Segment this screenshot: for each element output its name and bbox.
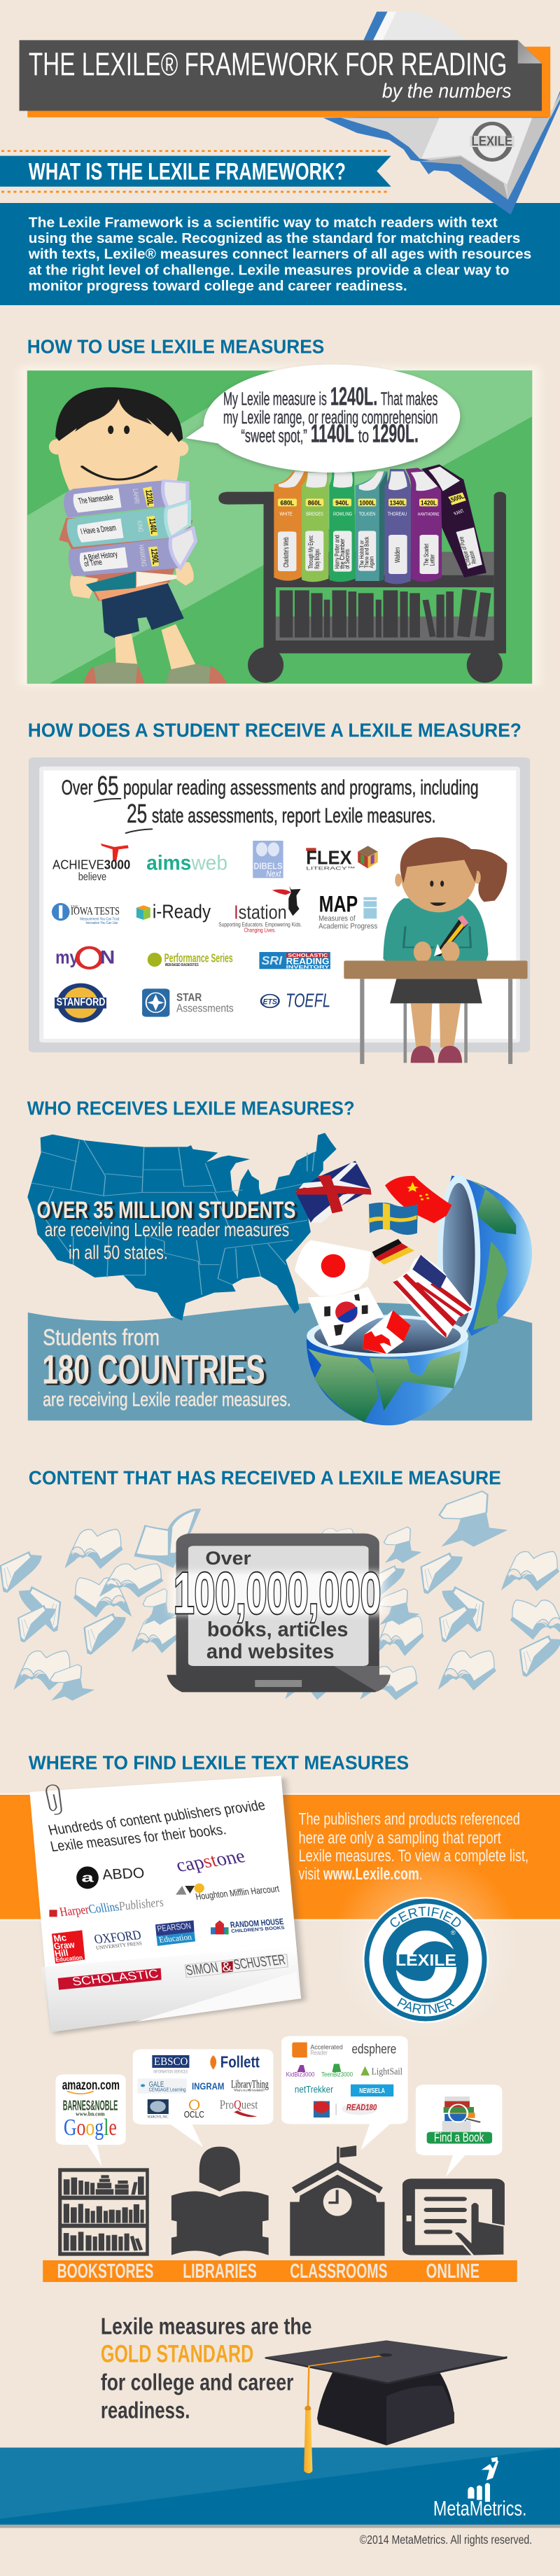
handwritten note: Lexile measures for their books. bbox=[49, 1821, 227, 1855]
book: a brief history of time: HAWKING bbox=[137, 545, 148, 567]
section: where to find, venues bbox=[43, 2036, 517, 2282]
section: header and what is the lexile framework bbox=[0, 12, 560, 305]
shoes bbox=[84, 662, 145, 683]
logo: achieve3000 bbox=[52, 844, 130, 883]
logo: read 180 bbox=[314, 2101, 377, 2118]
logo: ebsco: EBSCO bbox=[154, 2056, 188, 2068]
logo: mcgraw-hill education: Mc bbox=[52, 1932, 68, 1944]
illustration: book cart bbox=[218, 492, 506, 682]
callout: libraries bubble: INFORMATION SERVICES bbox=[153, 2069, 188, 2074]
book: the scarlet letter 1420L: Letter bbox=[428, 554, 436, 566]
book: i have a dream: I Have a Dream bbox=[80, 524, 117, 536]
logo: flex literacy: FLEX bbox=[306, 846, 352, 869]
badge: certified lexile partner: LEXILE bbox=[396, 1951, 456, 1969]
stat: 180 countries: 180 COUNTRIES bbox=[42, 1347, 265, 1392]
text block: assessments statement: Over bbox=[62, 776, 93, 799]
ribbon heading bbox=[0, 156, 391, 187]
book: harry potter 940L: ROWLING bbox=[333, 511, 352, 517]
logo: accelerated reader: Reader bbox=[310, 2049, 328, 2057]
text block: gold standard statement: Lexile measures are the bbox=[101, 2314, 312, 2339]
logo: accelerated reader: Accelerated bbox=[310, 2043, 343, 2051]
globe top half bbox=[438, 1175, 532, 1336]
icon: school building bbox=[290, 2146, 384, 2256]
book: harry potter 940L: the Chamber bbox=[339, 538, 346, 569]
text block: gold standard statement: GOLD STANDARD bbox=[101, 2340, 253, 2367]
badge: certified lexile partner bbox=[342, 1858, 510, 2023]
book: critique of pure reason 1500L: KANT bbox=[452, 508, 466, 516]
flag: united kingdom bbox=[295, 1161, 372, 1223]
logo: oxford: UNIVERSITY PRESS bbox=[95, 1941, 143, 1951]
book: a brief history of time: of Time bbox=[83, 558, 103, 568]
illustration: laptop bbox=[167, 1534, 391, 1692]
icon: bookshelf bbox=[58, 2168, 149, 2256]
handwritten note bbox=[46, 1797, 267, 1855]
book: the hobbit 1000L: Again bbox=[368, 556, 375, 568]
eyes and mouth bbox=[430, 881, 433, 887]
book: walden 1340L bbox=[384, 469, 411, 584]
text block: assessments statement: 65 bbox=[97, 770, 118, 801]
flag: south korea bbox=[308, 1287, 384, 1346]
logo: proquest bbox=[220, 2098, 258, 2117]
dotted rule bottom bbox=[1, 189, 389, 195]
section: where to find lexile text measures bbox=[0, 1752, 560, 2035]
book: through my eyes 860L: BRIDGES bbox=[306, 511, 323, 517]
book: the namesake: LAHIRI bbox=[131, 489, 141, 504]
logo: houghton mifflin harcourt: Houghton Mifflin Harcourt bbox=[195, 1883, 281, 1902]
logo: achieve3000: believe bbox=[78, 870, 106, 883]
callout: classrooms bubble bbox=[281, 2036, 408, 2150]
stat: over 100,000,000 books, articles and websites bbox=[174, 1548, 381, 1663]
book: the scarlet letter 1420L: The Scarlet bbox=[423, 543, 430, 566]
logo: harpercollins bbox=[49, 1896, 165, 1919]
logo: performance series: WEB-BASED DIAGNOSTICS bbox=[165, 963, 199, 967]
logo: performance series bbox=[148, 951, 233, 967]
logo: kidbiz3000 bbox=[286, 2065, 315, 2078]
logo: star assessments: STAR bbox=[176, 991, 202, 1004]
callout: bookstores bubble: amazon.com bbox=[62, 2078, 120, 2093]
speech text: “sweet spot,” bbox=[241, 426, 307, 447]
shorts bbox=[102, 583, 184, 638]
book: charlotte's web 680L bbox=[274, 471, 308, 581]
book: through my eyes 860L bbox=[302, 472, 328, 582]
text block: assessments statement: 25 bbox=[127, 798, 147, 829]
logos: assessments: TOEFL bbox=[286, 990, 330, 1011]
logo: teenbiz3000 bbox=[321, 2064, 353, 2078]
section: who receives lexile measures: OVER 35 MILLION STUDENTS bbox=[37, 1197, 295, 1224]
book: harry potter 940L: of Secrets bbox=[344, 549, 351, 569]
logo: teenbiz3000: TeenBiz3000 bbox=[321, 2071, 353, 2078]
logo: ingram: INGRAM bbox=[192, 2081, 224, 2092]
book: walden 1340L: THOREAU bbox=[388, 511, 407, 517]
head bbox=[395, 874, 401, 887]
illustration: graduation cap bbox=[265, 2340, 507, 2473]
logo: oxford: OXFORD bbox=[92, 1928, 143, 1947]
panel: intro blue band bbox=[0, 203, 560, 305]
logo: istation bbox=[218, 886, 302, 934]
logo: mcgraw-hill education: Education bbox=[55, 1954, 83, 1963]
book: the hobbit 1000L bbox=[356, 471, 388, 581]
logo: scholastic reading inventory: READING bbox=[286, 957, 329, 967]
logo: achieve3000: ACHIEVE3000 bbox=[52, 858, 130, 872]
shirt bbox=[59, 518, 193, 601]
logo: mcgraw-hill education bbox=[52, 1930, 85, 1963]
book: the hobbit 1000L: The Hobbit or bbox=[358, 540, 365, 568]
desk bbox=[344, 960, 528, 979]
speech text: to bbox=[358, 426, 369, 447]
text block: gold standard statement: for college and career bbox=[101, 2370, 294, 2395]
logo: lightsail: LightSail bbox=[372, 2066, 402, 2076]
book: critique of pure reason 1500L: Critique of Pure bbox=[457, 536, 472, 566]
logo: newsela: NEWSELA bbox=[359, 2087, 385, 2094]
logo: dibels next: Next bbox=[266, 869, 281, 879]
globe bottom half bbox=[307, 1315, 468, 1425]
logo: simon and schuster: SIMON bbox=[184, 1960, 220, 1978]
smile bbox=[82, 467, 156, 479]
stat: over 100,000,000 books, articles and websites: Over bbox=[205, 1548, 251, 1569]
logo: i-ready: i-Ready bbox=[153, 900, 211, 923]
heading: WHO RECEIVES LEXILE MEASURES? bbox=[27, 1098, 355, 1119]
logo: abdo: ABDO bbox=[102, 1865, 145, 1883]
logo: iowa tests bbox=[52, 903, 120, 925]
stat: 35 million students bbox=[37, 1197, 295, 1264]
book: the scarlet letter 1420L: 1420L bbox=[421, 499, 437, 507]
title bar orange backing bbox=[27, 47, 550, 118]
logo: oclc: OCLC bbox=[184, 2109, 204, 2120]
logo: librarything bbox=[231, 2079, 269, 2092]
head and ears bbox=[49, 439, 65, 454]
logos: assessments: Performance Series bbox=[164, 951, 233, 965]
book: the hobbit 1000L: 1000L bbox=[359, 499, 375, 507]
logo: myon: my bbox=[55, 947, 78, 968]
text block: gold standard statement: readiness. bbox=[101, 2398, 190, 2423]
speech text: 1240L. bbox=[330, 382, 377, 410]
logo: metametrics bbox=[433, 2457, 527, 2520]
book: through my eyes 860L: Through My Eyes: bbox=[307, 535, 314, 569]
logo: stanford bbox=[55, 983, 106, 1023]
torso bbox=[383, 898, 488, 962]
illustration: girl at desk bbox=[344, 837, 528, 1064]
book: i have a dream: 1140L bbox=[147, 518, 158, 534]
logo: star assessments bbox=[142, 988, 234, 1017]
book: critique of pure reason 1500L: 1500L bbox=[447, 493, 466, 504]
section: who receives lexile measures bbox=[27, 1098, 532, 1425]
speech text bbox=[223, 382, 438, 447]
logo: google: Google bbox=[64, 2115, 117, 2141]
text block: publishers note bbox=[299, 1809, 528, 1883]
logo: accelerated reader bbox=[292, 2043, 343, 2057]
logo: map bbox=[318, 891, 377, 930]
logo: map: Academic Progress bbox=[318, 922, 377, 930]
illustration: flying books bbox=[0, 1491, 560, 1701]
logo: myon bbox=[55, 947, 115, 968]
logo: istation: Supporting Educators. Empowering Kids. bbox=[218, 922, 302, 928]
logo: mcgraw-hill education: Graw bbox=[52, 1939, 76, 1952]
panel: category bar: LIBRARIES bbox=[183, 2260, 257, 2282]
logo: follett: Follett bbox=[220, 2053, 260, 2071]
logo: lightsail bbox=[360, 2066, 402, 2076]
badge: certified lexile partner: PARTNER bbox=[397, 1998, 455, 2014]
logo: capstone: capstone bbox=[173, 1845, 248, 1876]
logo: star assessments: Assessments bbox=[176, 1002, 234, 1015]
logo: iowa tests: Innovation You Can Use bbox=[85, 921, 118, 925]
logo: scholastic: SCHOLASTIC bbox=[71, 1967, 160, 1988]
handwritten note: Hundreds of content publishers provide bbox=[46, 1797, 267, 1838]
logo: random house bbox=[211, 1917, 285, 1934]
logo: proquest: ProQuest bbox=[220, 2098, 258, 2112]
legs and shoes bbox=[411, 1003, 432, 1048]
book: a brief history of time bbox=[69, 528, 196, 576]
logo: dibels next bbox=[253, 841, 284, 879]
logo: random house: RANDOM HOUSE bbox=[230, 1917, 284, 1930]
books on the cart bbox=[274, 464, 486, 584]
text block: assessments statement bbox=[62, 770, 479, 833]
logo: istation: Istation bbox=[234, 901, 287, 923]
title bar bbox=[20, 40, 542, 111]
stat: 35 million students: are receiving Lexile reader measures bbox=[45, 1219, 289, 1240]
wheels bbox=[248, 648, 284, 682]
hair bbox=[55, 387, 183, 442]
logo: ets toefl bbox=[261, 990, 330, 1011]
logo: harpercollins: HarperCollinsPublishers bbox=[58, 1896, 165, 1919]
logo: abdo bbox=[76, 1865, 145, 1889]
logo: kidbiz3000: KidBiz3000 bbox=[286, 2071, 315, 2078]
section: where to find, venues: BARNES&NOBLE bbox=[63, 2097, 118, 2113]
icon: paper clip bbox=[46, 1785, 62, 1814]
icon: lexile logo on book bbox=[470, 123, 514, 160]
panel: category bar bbox=[43, 2260, 517, 2282]
logos: assessments bbox=[52, 841, 378, 1023]
logo: dibels next: DIBELS bbox=[253, 862, 283, 872]
stat: 180 countries bbox=[42, 1324, 291, 1410]
logo: librarything: What's on your bookshelf? bbox=[234, 2088, 265, 2092]
logo: random house: CHILDREN'S BOOKS bbox=[231, 1925, 285, 1934]
section: how does a student receive a lexile measure bbox=[28, 720, 530, 1064]
logo: gale: GALE bbox=[149, 2080, 164, 2089]
logo: ets toefl: ETS bbox=[263, 997, 277, 1006]
logo: simon and schuster bbox=[184, 1952, 288, 1978]
icon: tablet with hand bbox=[402, 2178, 505, 2256]
badge: certified lexile partner: ® bbox=[451, 1929, 456, 1936]
stat: 180 countries: are receiving Lexile reader measures. bbox=[43, 1389, 291, 1410]
section: how to use lexile measures bbox=[20, 336, 539, 686]
hands bbox=[70, 575, 98, 598]
flag: germany bbox=[372, 1239, 414, 1265]
logo: pearson education: PEARSON bbox=[156, 1921, 192, 1933]
book: a brief history of time: 1290L bbox=[148, 548, 160, 565]
book: a brief history of time: A Brief History bbox=[83, 550, 119, 563]
logo: map: MAP bbox=[319, 891, 358, 917]
flag: canada bbox=[363, 1310, 411, 1354]
book: charlotte's web 680L: WHITE bbox=[279, 511, 293, 517]
stat: over 100,000,000 books, articles and websites: books, articles bbox=[207, 1618, 348, 1642]
logo: map: Measures of bbox=[318, 914, 356, 923]
panel: paper note with publisher logos: SCHUSTER bbox=[232, 1952, 287, 1973]
book: critique of pure reason 1500L bbox=[421, 464, 486, 578]
book: the scarlet letter 1420L: HAWTHORNE bbox=[418, 511, 440, 517]
logo: nettrekker: netTrekker bbox=[295, 2084, 333, 2094]
logo: houghton mifflin harcourt bbox=[176, 1883, 281, 1902]
logo: iowa tests: Measurement You Can Trust bbox=[80, 918, 120, 921]
legs bbox=[115, 634, 137, 667]
hair bbox=[400, 837, 477, 883]
panel: orange band bbox=[0, 1793, 560, 1921]
map: united states bbox=[27, 1133, 337, 1321]
callout: speech bubble bbox=[186, 365, 460, 474]
section: footer bbox=[0, 2314, 560, 2547]
illustration: boy holding books bbox=[49, 387, 227, 683]
book: i have a dream: KING bbox=[136, 520, 146, 533]
logo: aimsweb: aimsweb bbox=[146, 852, 227, 875]
logo: barnes and noble: www.bn.com bbox=[76, 2111, 105, 2118]
book: the namesake: 1210L bbox=[144, 489, 155, 506]
book: the hobbit 1000L: There and Back bbox=[363, 536, 370, 568]
book: through my eyes 860L: 860L bbox=[308, 499, 321, 507]
speech text: 1140L bbox=[311, 419, 354, 447]
book: the namesake bbox=[64, 480, 188, 517]
book: through my eyes 860L: Ruby Bridges bbox=[314, 549, 321, 569]
logo: istation: Changing Lives. bbox=[244, 927, 276, 934]
logo: myon: N bbox=[100, 947, 115, 968]
book: the hobbit 1000L: TOLKIEN bbox=[359, 511, 375, 517]
panel: paper note with publisher logos bbox=[29, 1776, 305, 2035]
illustration: open lexile book bbox=[323, 12, 560, 215]
logo: gale: CENGAGE Learning bbox=[149, 2087, 186, 2093]
logo: i-ready bbox=[136, 900, 211, 923]
skirt bbox=[390, 979, 482, 1003]
logo: mcgraw-hill education: Hill bbox=[53, 1947, 69, 1959]
illustration: open globe with flags bbox=[295, 1161, 532, 1425]
stat: over 100,000,000 books, articles and websites: and websites bbox=[206, 1640, 335, 1663]
logo: flex literacy: LITERACY™ bbox=[306, 865, 356, 871]
book: the scarlet letter 1420L bbox=[405, 468, 442, 582]
panel: category bar: CLASSROOMS bbox=[290, 2260, 388, 2282]
speech text: 1290L. bbox=[372, 419, 419, 447]
chair legs bbox=[404, 1003, 407, 1063]
stat: 35 million students: in all 50 states. bbox=[69, 1242, 168, 1264]
book: i have a dream bbox=[66, 502, 189, 547]
logo: ebsco bbox=[152, 2055, 189, 2074]
callout: speech bubble: That makes bbox=[381, 389, 438, 410]
flag: sweden bbox=[369, 1203, 418, 1235]
logo: newsela bbox=[351, 2085, 393, 2096]
book: critique of pure reason 1500L: Reason bbox=[468, 551, 478, 564]
footer band bbox=[0, 2448, 560, 2528]
book: harry potter 940L: 940L bbox=[335, 499, 349, 507]
text block: publishers note: visit www.Lexile.com. bbox=[299, 1864, 423, 1883]
logo: abdo: a bbox=[81, 1870, 94, 1885]
logo: pearson education bbox=[155, 1920, 195, 1946]
icon: person reading bbox=[172, 2147, 269, 2256]
panel: green scene bbox=[20, 366, 539, 686]
book: walden 1340L: Walden bbox=[394, 547, 401, 563]
text block: intro paragraph bbox=[28, 215, 531, 294]
panel: category bar: ONLINE bbox=[426, 2260, 479, 2282]
logo: scholastic bbox=[58, 1967, 162, 1990]
book: the namesake: The Namesake bbox=[77, 493, 114, 506]
logo: iowa tests: THE bbox=[71, 904, 78, 909]
icon: book stack with magnifier bbox=[442, 2096, 480, 2132]
logos: assessments: IOWA TESTS bbox=[71, 906, 120, 918]
callout: bookstores bubble bbox=[56, 2074, 126, 2166]
panel: whiteboard bbox=[29, 757, 530, 1052]
logo: scholastic reading inventory: SRI bbox=[261, 954, 283, 967]
logo: simon and schuster: & bbox=[220, 1959, 234, 1975]
logo: scholastic reading inventory: INVENTORY bbox=[286, 965, 330, 969]
logo: marcive: MARCIVE, INC. bbox=[148, 2115, 169, 2119]
logo: oclc bbox=[184, 2100, 204, 2120]
lower shelf books bbox=[279, 589, 491, 638]
logo: marcive bbox=[148, 2099, 169, 2119]
flag: japan bbox=[295, 1240, 372, 1296]
flag: united states bbox=[393, 1255, 473, 1338]
logo: read 180: READ180 bbox=[346, 2103, 377, 2112]
hands and pencil bbox=[434, 917, 468, 956]
logo: gale bbox=[137, 2078, 187, 2094]
text block: gold standard statement bbox=[101, 2314, 312, 2423]
panel: wave band bbox=[28, 1303, 532, 1420]
icon: lexile logo on book: LEXILE bbox=[471, 134, 512, 149]
book: walden 1340L: 1340L bbox=[390, 499, 406, 507]
section: where to find, venues: LibraryThing bbox=[231, 2079, 269, 2091]
flag: china bbox=[385, 1176, 451, 1223]
callout: online bubble bbox=[416, 2085, 502, 2177]
callout: libraries bubble bbox=[133, 2049, 273, 2147]
book: harry potter 940L bbox=[329, 472, 356, 582]
logo: follett bbox=[210, 2053, 260, 2071]
badge: certified lexile partner: CERTIFIED bbox=[391, 1907, 461, 1927]
held book bbox=[85, 572, 136, 592]
logo: scholastic reading inventory bbox=[259, 952, 330, 969]
book: charlotte's web 680L: 680L bbox=[281, 499, 294, 507]
button: find a book: Find a Book bbox=[434, 2130, 484, 2145]
logo: pearson education: Education bbox=[158, 1933, 192, 1945]
panel: category bar: BOOKSTORES bbox=[57, 2260, 153, 2282]
logo: scholastic reading inventory: SCHOLASTIC bbox=[288, 953, 328, 958]
ponytail bbox=[464, 849, 507, 902]
book: harry potter 940L: Harry Potter and bbox=[333, 535, 341, 569]
stat: 180 countries: Students from bbox=[43, 1324, 160, 1350]
speech text: My Lexile measure is bbox=[223, 389, 327, 410]
heading: HOW TO USE LEXILE MEASURES bbox=[27, 336, 324, 358]
book: charlotte's web 680L: Charlotte's Web bbox=[283, 537, 290, 568]
dotted rule top bbox=[1, 148, 389, 154]
logo: barnes and noble bbox=[63, 2097, 118, 2118]
logo: edsphere: edsphere bbox=[352, 2041, 396, 2057]
eyes bbox=[108, 426, 113, 434]
logo: stanford: STANFORD bbox=[57, 996, 106, 1009]
section: content that has received a lexile measure bbox=[0, 1468, 560, 1701]
logo: oxford bbox=[92, 1928, 143, 1951]
